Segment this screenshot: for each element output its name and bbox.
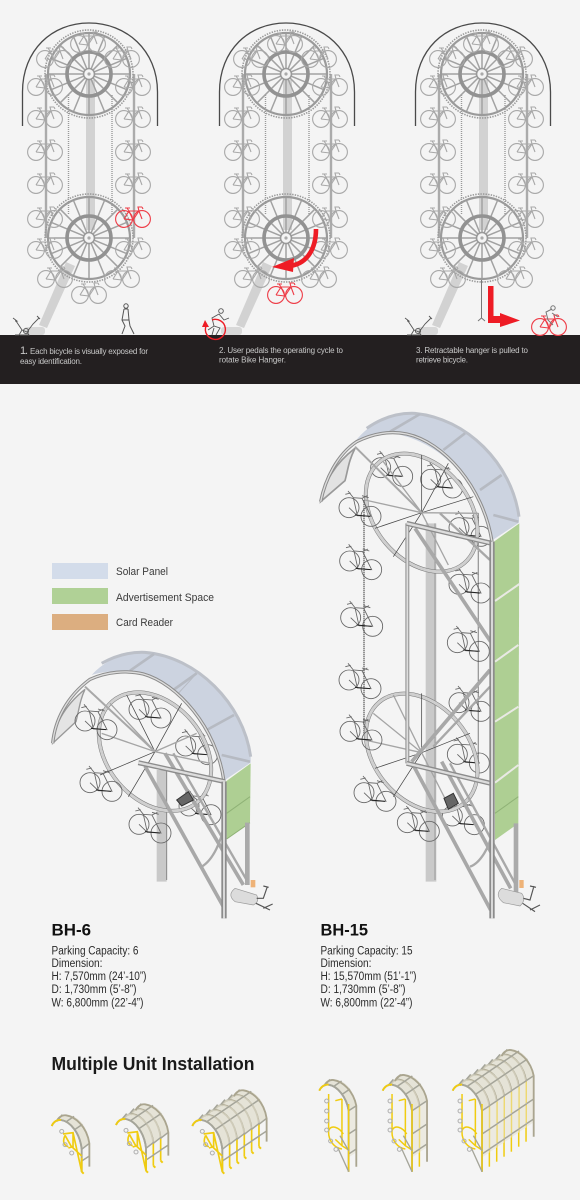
diagram 3: retrieve bicycle bbox=[405, 23, 566, 335]
illustration: tall unit, 8 frames bbox=[453, 1049, 534, 1172]
operating cycle bbox=[256, 886, 273, 910]
front bicycles bbox=[339, 491, 439, 841]
illustration: tall unit, 3 frames bbox=[383, 1074, 427, 1172]
text block: BH-15 specs: Dimension: bbox=[320, 958, 372, 970]
front arch bbox=[321, 433, 492, 542]
text block: BH-6 specs: BH-6 bbox=[52, 922, 91, 940]
text block: BH-6 specs: D: 1,730mm (5’-8”) bbox=[52, 984, 137, 996]
caption 3: 3. Retractable hanger is pulled to bbox=[416, 346, 529, 355]
icon: operating cycle bbox=[13, 316, 40, 335]
drive motor bbox=[177, 792, 193, 806]
text block: BH-15 specs bbox=[320, 922, 417, 1010]
icon: operating cycle bbox=[405, 316, 432, 335]
diagram 1: visible bicycles bbox=[13, 23, 158, 335]
illustration: short unit, 2 frames bbox=[52, 1115, 89, 1174]
text block: BH-15 specs: Parking Capacity: 15 bbox=[320, 946, 412, 958]
text block: BH-15 specs: H: 15,570mm (51’-1”) bbox=[320, 971, 417, 983]
caption 1: easy identification. bbox=[20, 357, 82, 366]
text block: BH-15 specs: D: 1,730mm (5’-8”) bbox=[320, 984, 406, 996]
arrow: red L arrow bbox=[488, 286, 520, 327]
card reader bbox=[519, 880, 524, 888]
cross beams bbox=[407, 523, 492, 783]
text block: BH-6 specs bbox=[52, 922, 147, 1010]
enclosure bbox=[231, 888, 258, 905]
text block: BH-15 specs: W: 6,800mm (22’-4”) bbox=[320, 998, 413, 1010]
door panel bbox=[321, 448, 355, 502]
chains bbox=[364, 500, 478, 767]
drive motor bbox=[444, 793, 458, 809]
rear post bbox=[240, 823, 254, 885]
icon: red pedal rotation circle bbox=[202, 319, 225, 339]
front post bbox=[484, 542, 500, 918]
card reader bbox=[251, 880, 255, 887]
solar panel roof bbox=[92, 652, 251, 780]
caption 2: rotate Bike Hanger. bbox=[219, 356, 286, 364]
rotating wheel bbox=[76, 670, 234, 833]
illustration: BH-6 unit bbox=[53, 652, 273, 918]
text block: BH-6 specs: Parking Capacity: 6 bbox=[52, 946, 138, 958]
diagonal struts bbox=[85, 687, 247, 907]
text block: BH-6 specs: W: 6,800mm (22’-4”) bbox=[52, 998, 144, 1010]
icon: gray bicycle row five bbox=[509, 207, 543, 227]
enclosure bbox=[498, 888, 524, 906]
icon: red highlighted bicycle bbox=[116, 207, 150, 227]
caption 3: retrieve bicycle. bbox=[416, 356, 468, 364]
caption 1 bbox=[20, 345, 148, 366]
heading: multiple unit installation: Multiple Unit Installation bbox=[52, 1053, 254, 1074]
legend bbox=[52, 563, 214, 630]
rear post bbox=[509, 823, 523, 893]
front arch bbox=[53, 672, 224, 782]
icon: bottom bicycle bbox=[72, 283, 106, 303]
text block: BH-6 specs: H: 7,570mm (24’-10”) bbox=[52, 971, 147, 983]
arrow: red rotation arrow bbox=[272, 229, 316, 272]
icon: retractable hanger bbox=[478, 280, 485, 321]
icon: red bicycle at bottom bbox=[268, 283, 302, 303]
illustration: short unit, 4 frames bbox=[116, 1104, 168, 1173]
icon: rider on operating cycle bbox=[208, 309, 229, 335]
illustration: BH-15 unit bbox=[321, 413, 540, 918]
text block: BH-15 specs: BH-15 bbox=[320, 922, 368, 940]
icon: gray bicycle row five bbox=[313, 207, 347, 227]
green advertisement panel bbox=[494, 523, 519, 840]
rear bicycles bbox=[371, 451, 491, 835]
central column bbox=[147, 770, 177, 882]
black caption band bbox=[0, 335, 580, 384]
caption 1: 1. bbox=[20, 345, 28, 357]
front-left frame post bbox=[401, 523, 413, 763]
legend item: solar panel: Solar Panel bbox=[116, 566, 168, 578]
bicycles behind the wheel bbox=[129, 693, 221, 825]
top wheel bbox=[343, 432, 500, 594]
bottom wheel bbox=[343, 672, 500, 834]
legend item: advertisement space: Advertisement Space bbox=[116, 592, 214, 604]
central column bbox=[415, 523, 447, 882]
green advertisement panel bbox=[226, 763, 251, 839]
cross beam bbox=[138, 763, 225, 782]
caption 3 bbox=[416, 346, 529, 364]
solar panel roof bbox=[355, 413, 519, 540]
illustration: short unit, 7 frames bbox=[192, 1090, 267, 1174]
illustration: tall unit, 2 frames bbox=[319, 1079, 356, 1172]
legend item: card reader bbox=[52, 614, 173, 630]
legend item: card reader: Card Reader bbox=[116, 617, 173, 629]
caption 1: Each bicycle is visually exposed for bbox=[30, 347, 148, 356]
diagram 2: pedalling rotates hanger bbox=[202, 23, 354, 339]
icon: red bicycle with rider bbox=[532, 306, 566, 335]
operating cycle bbox=[523, 886, 540, 912]
diagonal struts bbox=[355, 447, 515, 910]
panel: operating sequence strip bbox=[0, 23, 580, 384]
text block: BH-6 specs: Dimension: bbox=[52, 958, 102, 970]
caption 2: 2. User pedals the operating cycle to bbox=[219, 346, 344, 355]
legend item: advertisement space bbox=[52, 588, 214, 604]
front post bbox=[216, 782, 232, 918]
bicycles in front bbox=[75, 704, 171, 843]
caption 2 bbox=[219, 346, 344, 364]
door panel bbox=[53, 689, 85, 743]
icon: pedestrian bbox=[122, 304, 134, 334]
legend item: solar panel bbox=[52, 563, 168, 579]
